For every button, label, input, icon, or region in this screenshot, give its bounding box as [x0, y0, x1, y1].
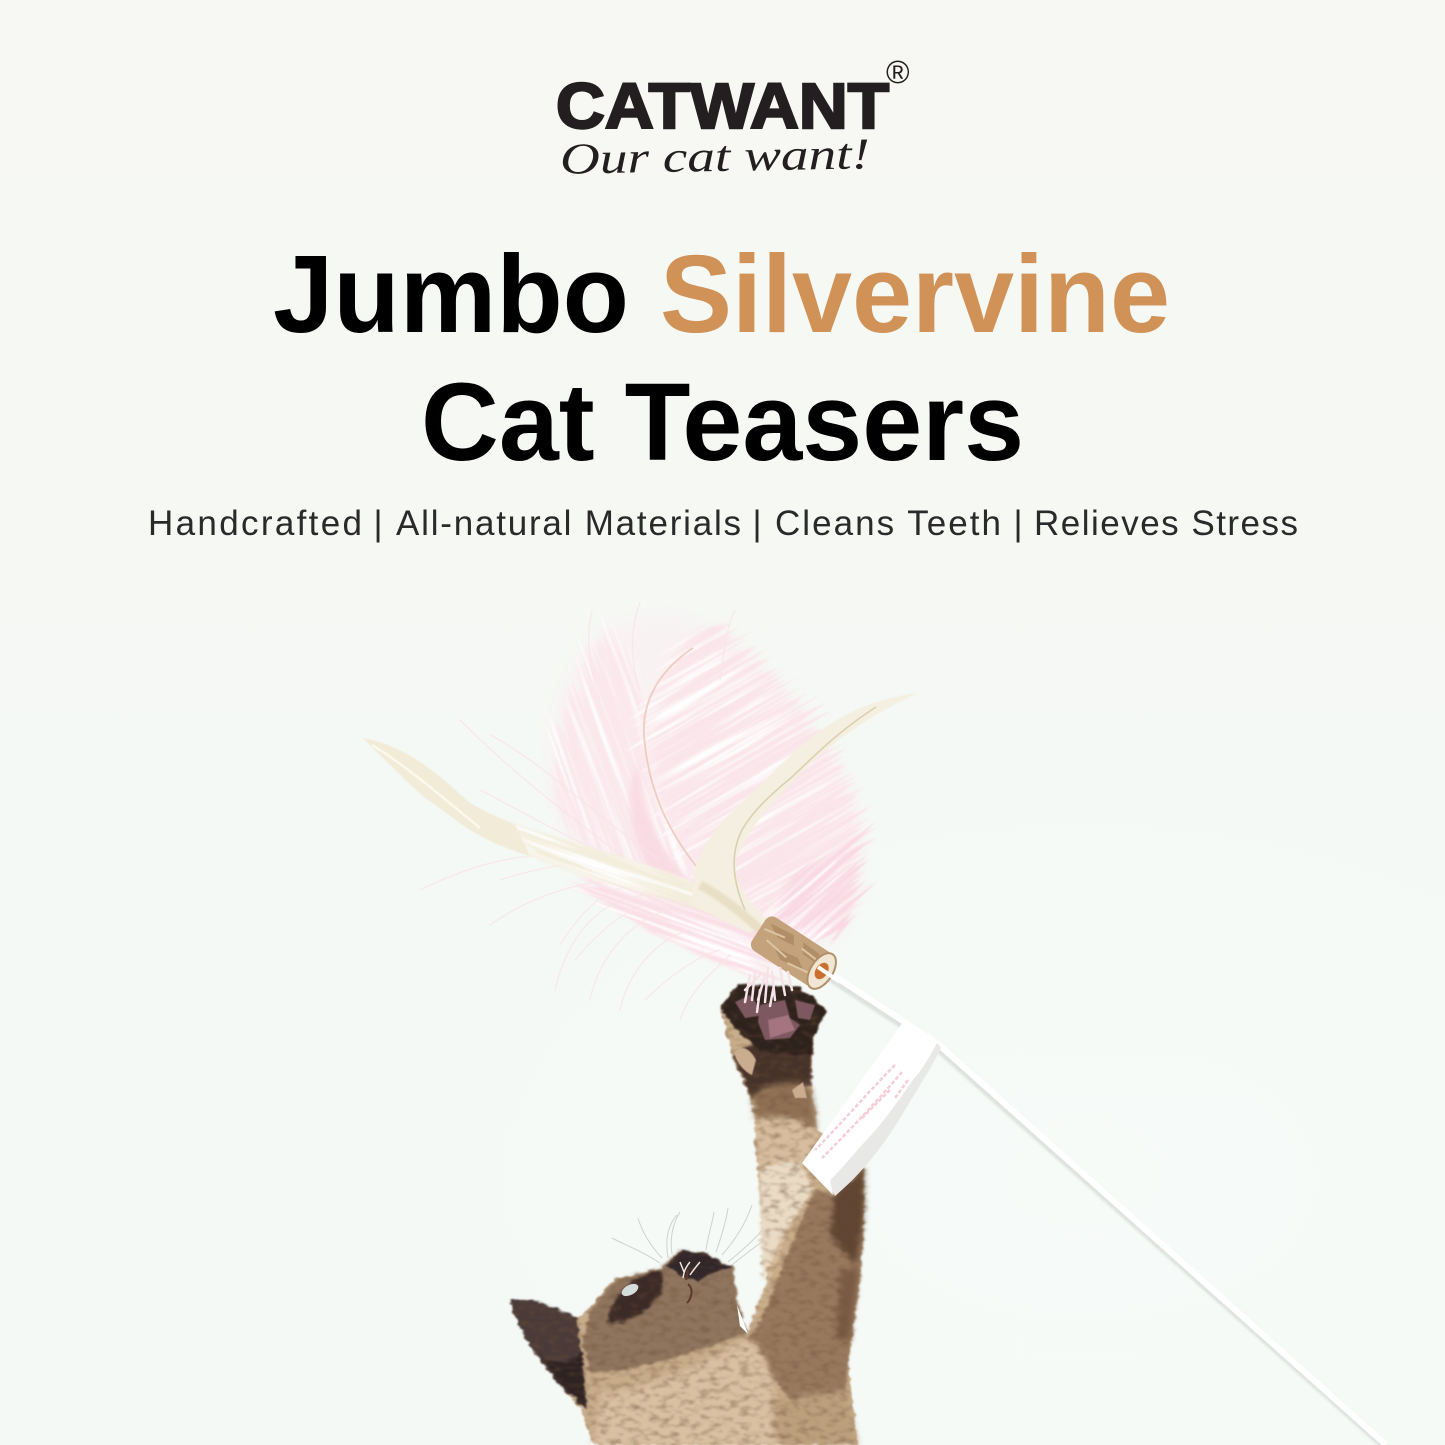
title line 1: Silvervine — [660, 233, 1170, 356]
cat silhouette — [510, 984, 864, 1445]
subtitle: product features: Handcrafted — [148, 504, 362, 543]
title line 2: Cat Teasers — [421, 361, 1024, 484]
feather left plume — [461, 578, 792, 957]
tag claw behind — [868, 1062, 892, 1082]
feather tips caught in paw — [745, 968, 792, 1012]
feather right fringe — [713, 796, 907, 989]
feather stray barbs — [420, 602, 735, 1020]
registered mark: ® — [886, 54, 910, 90]
title line 1 — [273, 233, 1170, 356]
cat jaw highlight — [737, 1305, 748, 1334]
cat muzzle — [666, 1250, 733, 1282]
stick end cap — [802, 948, 842, 994]
stick body — [748, 913, 842, 994]
cat whiskers — [612, 1205, 778, 1265]
subtitle: product features: | — [374, 504, 383, 543]
subtitle: product features: All-natural Materials — [396, 504, 741, 543]
subtitle: product features — [148, 504, 1298, 543]
tag back fold — [825, 1043, 941, 1196]
logo tagline: Our cat want! — [560, 129, 870, 184]
cat nose line — [686, 1270, 692, 1303]
cat forearm and wrist shading — [733, 1040, 812, 1100]
photo: cat reaching for feather teaser — [363, 532, 1386, 1445]
wand label tag — [802, 1022, 941, 1196]
feather right lobe — [511, 532, 993, 1028]
feather lower plume — [537, 803, 813, 1049]
cream feathers — [363, 693, 918, 999]
feather center shade — [630, 760, 710, 905]
cat raised brown arm — [745, 1167, 864, 1400]
teaser wand — [822, 968, 1386, 1445]
logo wordmark: CATWANT — [556, 70, 889, 142]
cat knuckles — [734, 1048, 807, 1098]
cream feather right — [692, 693, 918, 933]
cat pale chest — [593, 1340, 776, 1445]
cream feather left — [363, 738, 769, 999]
feather soft halo — [548, 616, 863, 985]
title — [273, 233, 1170, 484]
title line 1: Jumbo — [273, 233, 629, 356]
cat paw — [720, 984, 826, 1055]
feather spine — [644, 648, 696, 866]
cat — [510, 968, 864, 1445]
paw pads — [735, 995, 815, 1040]
subtitle: product features: Relieves Stress — [1034, 504, 1298, 543]
subtitle: product features: Cleans Teeth — [775, 504, 1001, 543]
tag fine print — [815, 1065, 908, 1158]
tag front — [802, 1022, 937, 1195]
cat eye — [620, 1281, 640, 1299]
logo: CATWANT — [556, 54, 910, 184]
silvervine stick — [748, 913, 842, 994]
cat light arm — [747, 1074, 817, 1333]
cat head — [582, 1250, 747, 1372]
cat ear — [510, 1300, 586, 1410]
pink feather — [420, 532, 993, 1049]
cat body fur — [510, 984, 864, 1445]
subtitle: product features: | — [1014, 504, 1023, 543]
cat eye mask — [607, 1271, 663, 1322]
subtitle: product features: | — [752, 504, 762, 543]
